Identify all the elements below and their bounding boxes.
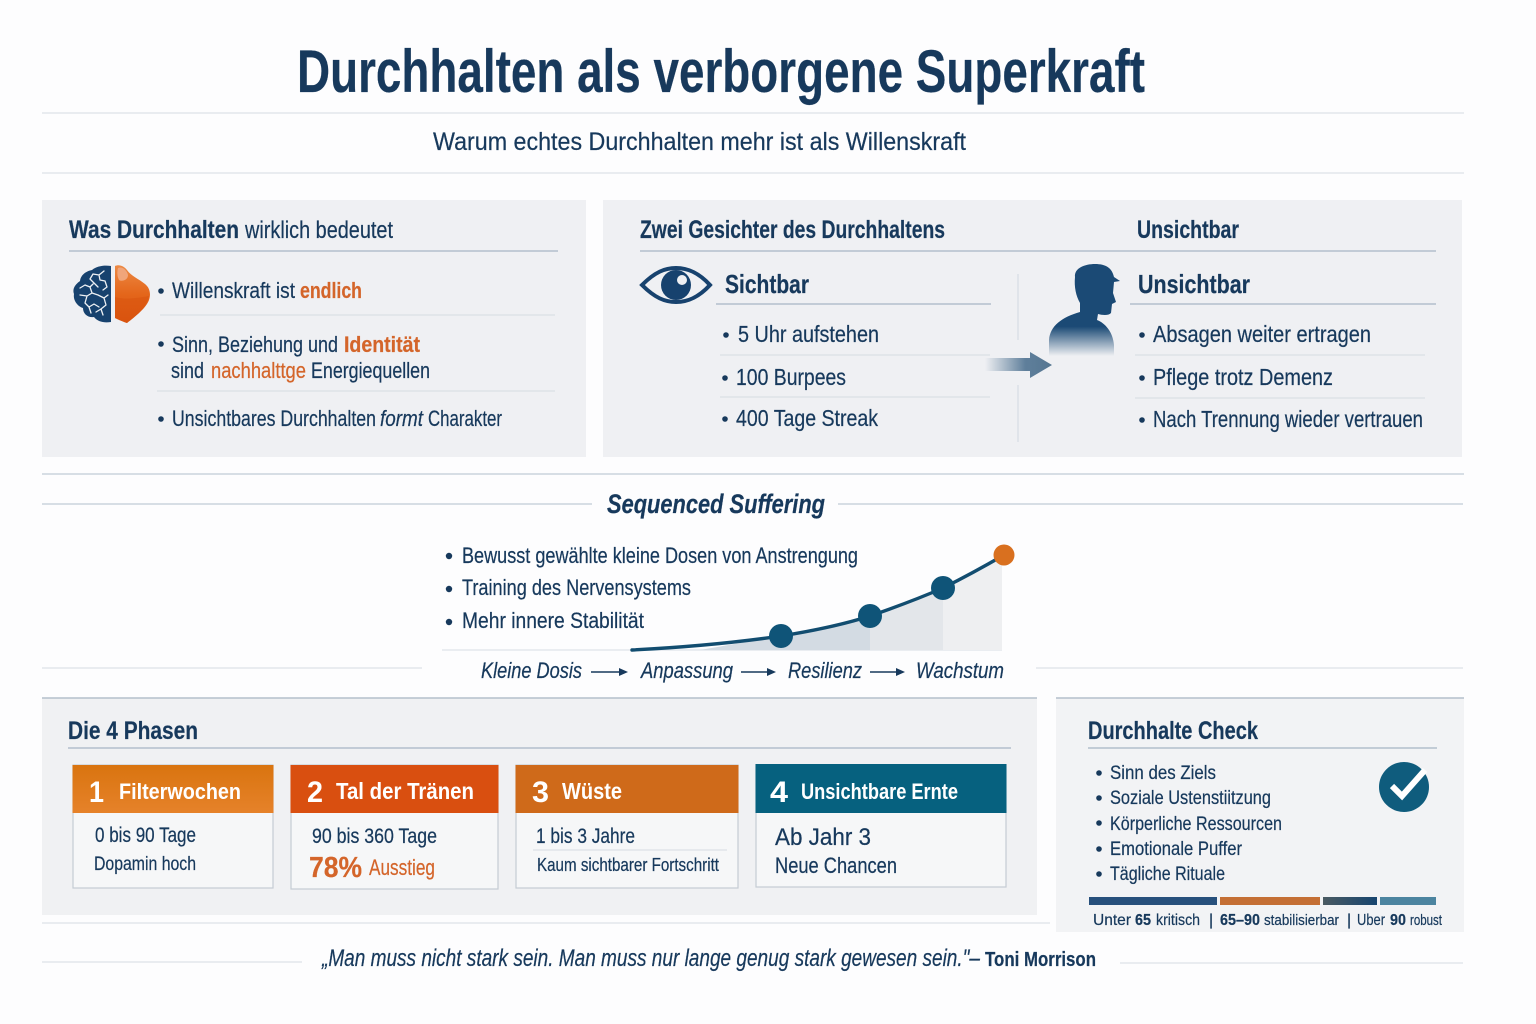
card: phase 1 [72, 765, 274, 888]
bullet: Sinn, Beziehung und Identität: Identität [344, 332, 421, 357]
checklist [1096, 763, 1282, 885]
bullet: Willenskraft: endlich [300, 278, 362, 303]
arrow: sichtbar to unsichtbar [985, 352, 1052, 378]
flow: Kleine Dosis to Wachstum: Wachstum [916, 658, 1004, 683]
list: unsichtbar: Absagen weiter ertragen [1153, 321, 1371, 347]
card: phase 4: Unsichtbare Ernte [801, 779, 958, 804]
bullet: Unsichtbares Durchhalten: Unsichtbares Durchhalten [172, 406, 376, 431]
card: phase 4: Ab Jahr 3 [775, 824, 871, 851]
flow: Kleine Dosis to Wachstum: Anpassung [639, 658, 734, 683]
heading: Sequenced Suffering: Sequenced Suffering [607, 489, 825, 519]
card: phase 2: Ausstieg [369, 855, 435, 880]
subtitle: Warum echtes Durchhalten mehr ist als Willenskraft [433, 128, 966, 156]
card: phase 4: Neue Chancen [775, 853, 897, 878]
card: phase 2: 90 bis 360 Tage [312, 825, 437, 848]
checklist: Tägliche Rituale [1110, 864, 1225, 885]
score scale labels: stabilisierbar [1264, 912, 1339, 929]
list: Sequenced Suffering: Mehr innere Stabilität [462, 608, 644, 633]
card: phase 4 [756, 764, 1006, 887]
card: phase 2: 2 [307, 776, 323, 809]
card: phase 1: 1 [89, 776, 104, 809]
card: phase 3: Kaum sichtbarer Fortschritt [537, 855, 719, 875]
bullet: Willenskraft [158, 278, 362, 303]
card: phase 3: 3 [532, 776, 549, 809]
icon: check badge [1379, 762, 1429, 812]
panel: Zwei Gesichter des Durchhaltens [603, 200, 1462, 457]
panel heading: Durchhalte Check [1088, 717, 1258, 745]
list: sichtbar [720, 321, 990, 431]
score scale labels: kritisch [1156, 912, 1200, 929]
bullet: Sinn, Beziehung und Identität: Energiequellen [311, 358, 430, 383]
card: phase 2: 78% [309, 852, 362, 884]
panel heading: Was Durchhalten [69, 216, 239, 244]
bullet: Sinn, Beziehung und Identität: nachhalttge [211, 358, 306, 383]
list: unsichtbar: Pflege trotz Demenz [1153, 364, 1333, 390]
score scale labels: | [1209, 912, 1213, 929]
bullet: Unsichtbares Durchhalten: formt [380, 406, 424, 431]
score scale labels: Unter [1093, 912, 1132, 929]
card: phase 2 [290, 765, 498, 889]
checklist: Soziale Ustenstiitzung [1110, 788, 1271, 809]
checklist: Körperliche Ressourcen [1110, 814, 1282, 835]
score scale labels: 65–90 [1220, 912, 1260, 929]
panel: Die 4 Phasen [42, 698, 1037, 915]
card: phase 3 [516, 765, 738, 888]
card: phase 4: 4 [770, 776, 788, 809]
bullet: Unsichtbares Durchhalten: Charakter [428, 406, 502, 431]
panel: Durchhalte Check [1056, 698, 1464, 932]
score scale labels: Uber [1357, 912, 1386, 929]
flow: Kleine Dosis to Wachstum: Resilienz [788, 658, 862, 683]
list: Sequenced Suffering: Bewusst gewählte kleine Dosen von Anstrengung [462, 543, 858, 568]
panel heading [69, 216, 393, 244]
flow: Kleine Dosis to Wachstum [481, 658, 1004, 683]
bullet: Sinn, Beziehung und Identität: sind [171, 358, 204, 383]
list: sichtbar: 400 Tage Streak [736, 405, 878, 431]
score scale labels: robust [1410, 912, 1443, 929]
bullet: Willenskraft: Willenskraft ist [172, 278, 295, 303]
card: phase 1: Dopamin hoch [94, 854, 196, 875]
list: sichtbar: 100 Burpees [736, 364, 846, 390]
panel heading: Die 4 Phasen [68, 717, 198, 745]
bullet: Sinn, Beziehung und Identität: Sinn, Beziehung und [172, 332, 338, 357]
list: unsichtbar [1135, 321, 1425, 432]
card: phase 3: 1 bis 3 Jahre [536, 825, 635, 848]
panel heading: Zwei Gesichter des Durchhaltens [640, 216, 945, 244]
score scale bar [1089, 897, 1436, 905]
heading: Unsichtbar: Unsichtbar [1137, 216, 1239, 244]
list: unsichtbar: Nach Trennung wieder vertrauen [1153, 406, 1423, 432]
card: phase 3: Wüste [562, 778, 622, 804]
title: Durchhalten als verborgene Superkraft [297, 38, 1145, 105]
score scale labels: 90 [1390, 912, 1406, 929]
bullet: Sinn, Beziehung und Identität [158, 332, 430, 383]
card: phase 2: Tal der Tränen [336, 778, 474, 804]
score scale labels [1093, 912, 1443, 929]
checklist: Sinn des Ziels [1110, 763, 1216, 784]
list: Sequenced Suffering: Training des Nervensystems [462, 575, 691, 600]
heading: Unsichtbar sub: Unsichtbar [1138, 269, 1250, 299]
card: phase 1: 0 bis 90 Tage [95, 824, 196, 847]
flow: Kleine Dosis to Wachstum: Kleine Dosis [481, 658, 582, 683]
checklist: Emotionale Puffer [1110, 839, 1243, 860]
list: Sequenced Suffering [446, 543, 858, 633]
chart: growth curve [442, 544, 1014, 650]
icon: person silhouette [1049, 264, 1120, 356]
score scale labels: 65 [1135, 912, 1151, 929]
list: sichtbar: 5 Uhr aufstehen [738, 321, 879, 347]
icon: eye [642, 268, 710, 302]
quote: Toni Morrison [985, 949, 1096, 971]
score scale labels: | [1347, 912, 1351, 929]
card: phase 1: Filterwochen [119, 779, 241, 804]
heading: Sichtbar: Sichtbar [725, 269, 809, 299]
quote: „Man muss nicht stark sein. Man muss nur lange genug stark gewesen sein."– [321, 945, 981, 972]
panel: Was Durchhalten wirklich bedeutet [42, 200, 586, 457]
panel heading: wirklich bedeutet [244, 217, 393, 244]
icon: brain [73, 265, 150, 323]
